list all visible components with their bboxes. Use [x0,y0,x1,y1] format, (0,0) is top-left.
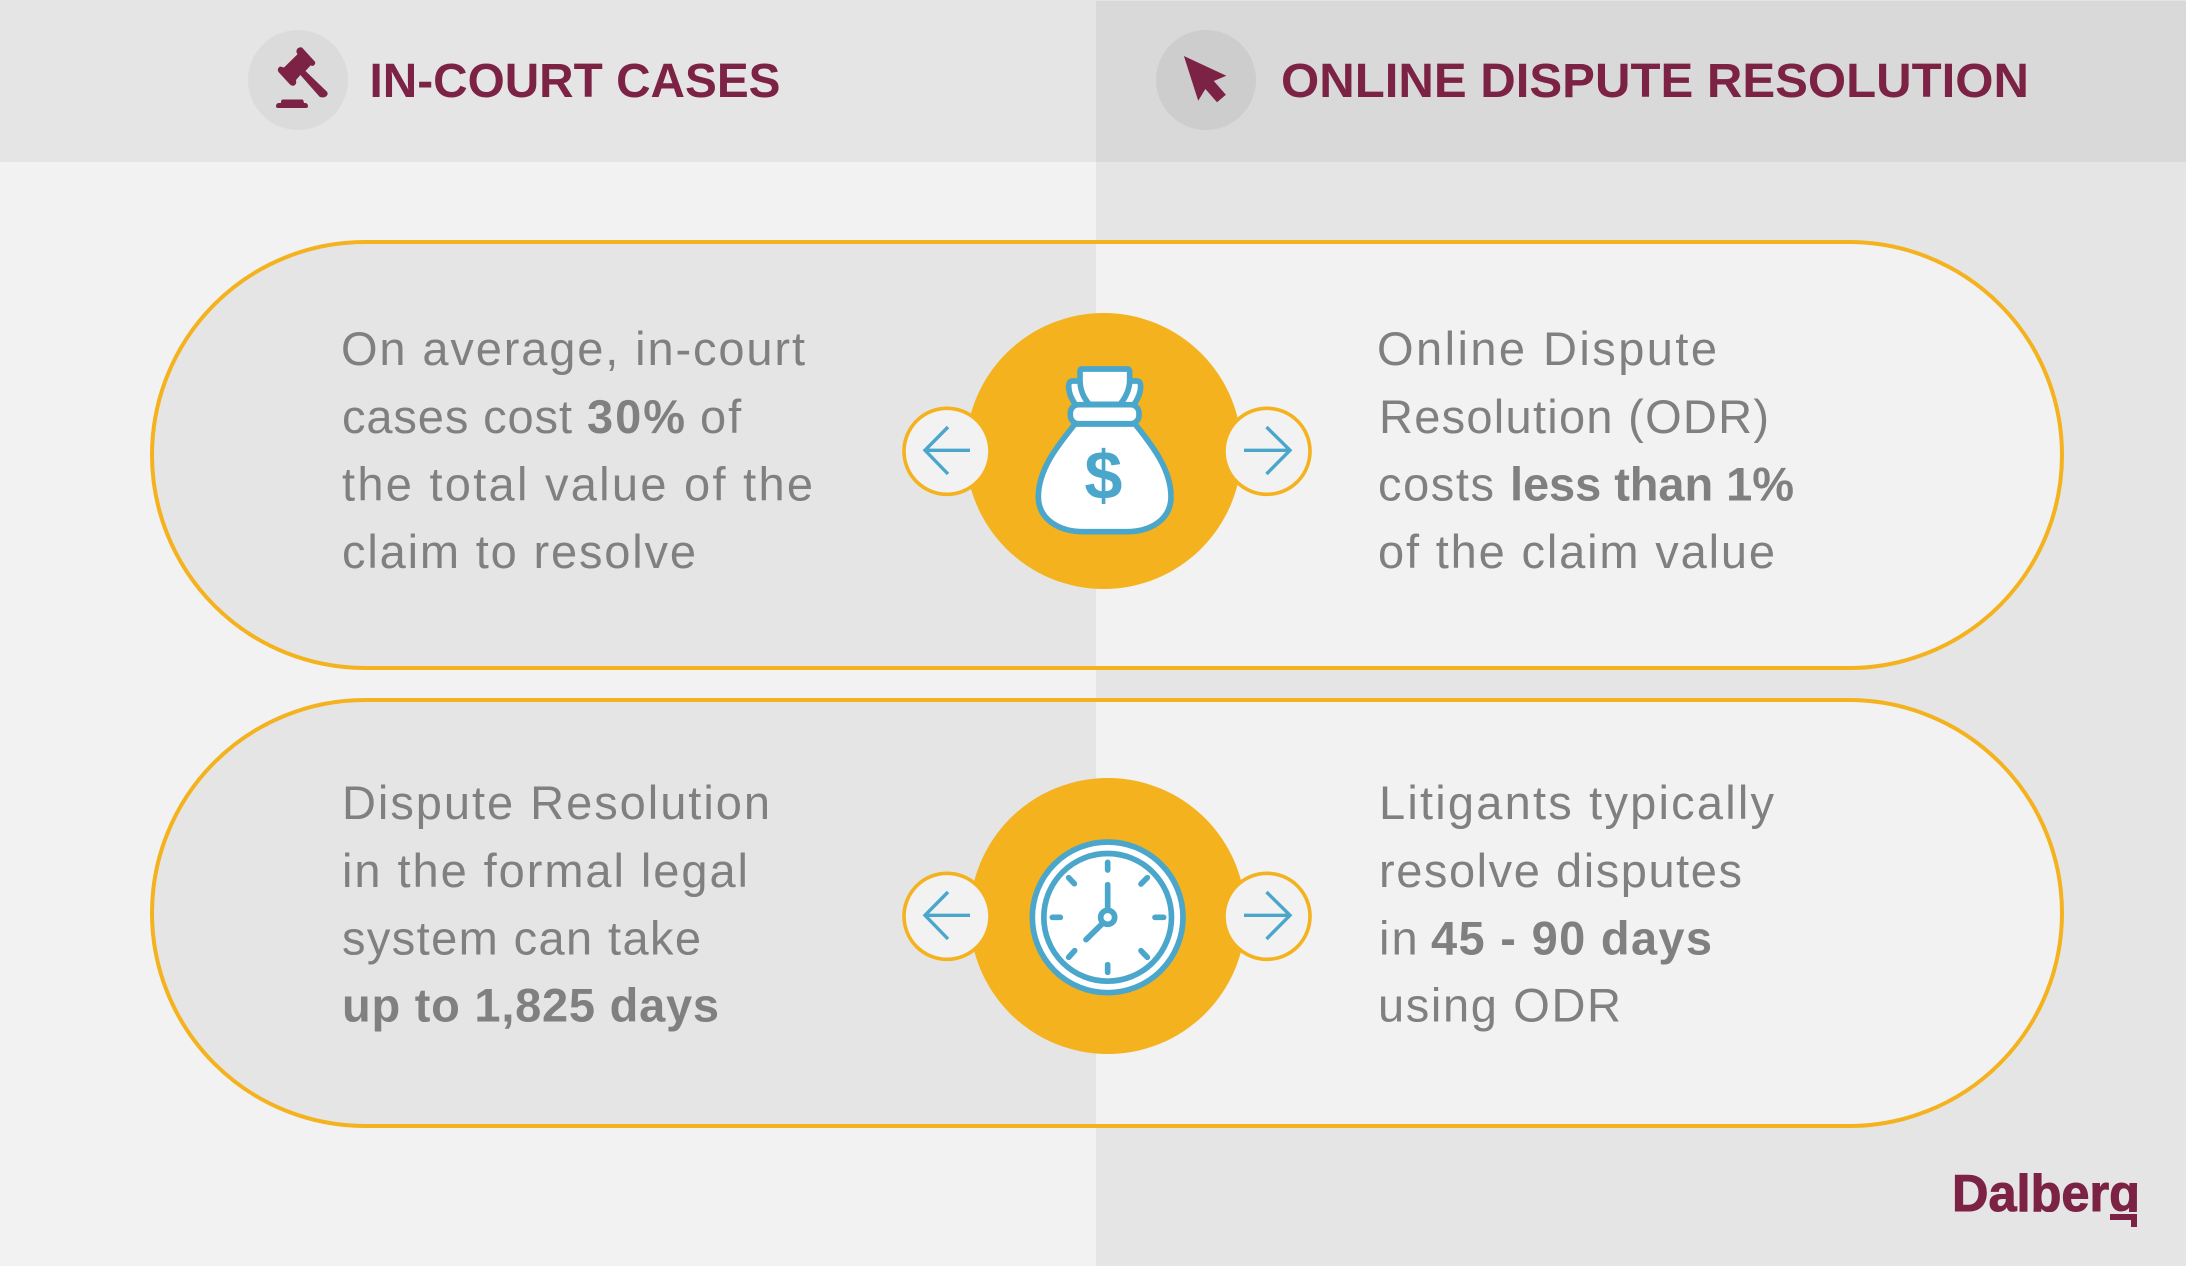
heading: online dispute resolution: ONLINE DISPUTE RESOLUTION [1281,55,2029,108]
background: right column [1096,0,2186,1266]
text: in-court cost: of [700,390,743,443]
icon: money bag: $ [1084,438,1122,514]
text: in-court cost: the total value of the [342,458,813,510]
text: in-court cost: On average, in-court [341,322,805,375]
icon: clock [970,778,1246,1054]
text: online dispute resolution duration: resolve disputes [1379,844,1742,897]
text: in-court duration [342,776,770,1032]
callout: left arrow [904,873,990,959]
background: left column [0,0,1096,1266]
text: online dispute resolution cost: costs [1378,458,1494,510]
text: online dispute resolution duration: using ODR [1378,979,1621,1032]
text: online dispute resolution cost: less than 1% [1510,458,1794,510]
text: online dispute resolution duration: Litigants typically [1379,776,1774,829]
callout: left arrow [904,408,990,494]
panel: time comparison [152,700,2062,1126]
callout: right arrow [1224,408,1310,494]
text: online dispute resolution duration: 45 - 90 days [1431,912,1712,964]
text: online dispute resolution cost: of the claim value [1378,525,1775,578]
text: online dispute resolution cost: Online Dispute [1377,322,1717,375]
text: in-court duration: system can take [342,912,701,964]
heading: in-court cases: IN-COURT CASES [370,55,780,108]
text: in-court cost [341,322,813,578]
panel: cost comparison [152,242,2062,668]
text: online dispute resolution cost [1377,322,1794,578]
text: in-court duration: up to 1,825 days [342,979,719,1032]
text: in-court duration: in the formal legal [342,844,748,897]
header: online dispute resolution [1096,1,2186,162]
text: in-court cost: 30% [587,390,685,443]
icon: money bag [966,313,1242,589]
logo: Dalberg: Dalberg [1952,1165,2140,1223]
text: online dispute resolution duration: in [1379,912,1420,964]
text: in-court duration: Dispute Resolution [342,776,770,829]
text: online dispute resolution cost: Resolution (ODR) [1379,390,1769,443]
icon: cursor arrow [1156,30,1256,130]
icon: gavel [248,30,348,130]
text: in-court cost: claim to resolve [342,525,696,578]
callout: right arrow [1224,873,1310,959]
text: online dispute resolution duration [1378,776,1774,1032]
text: in-court cost: cases cost [342,390,572,443]
header: in-court cases [0,0,1096,162]
